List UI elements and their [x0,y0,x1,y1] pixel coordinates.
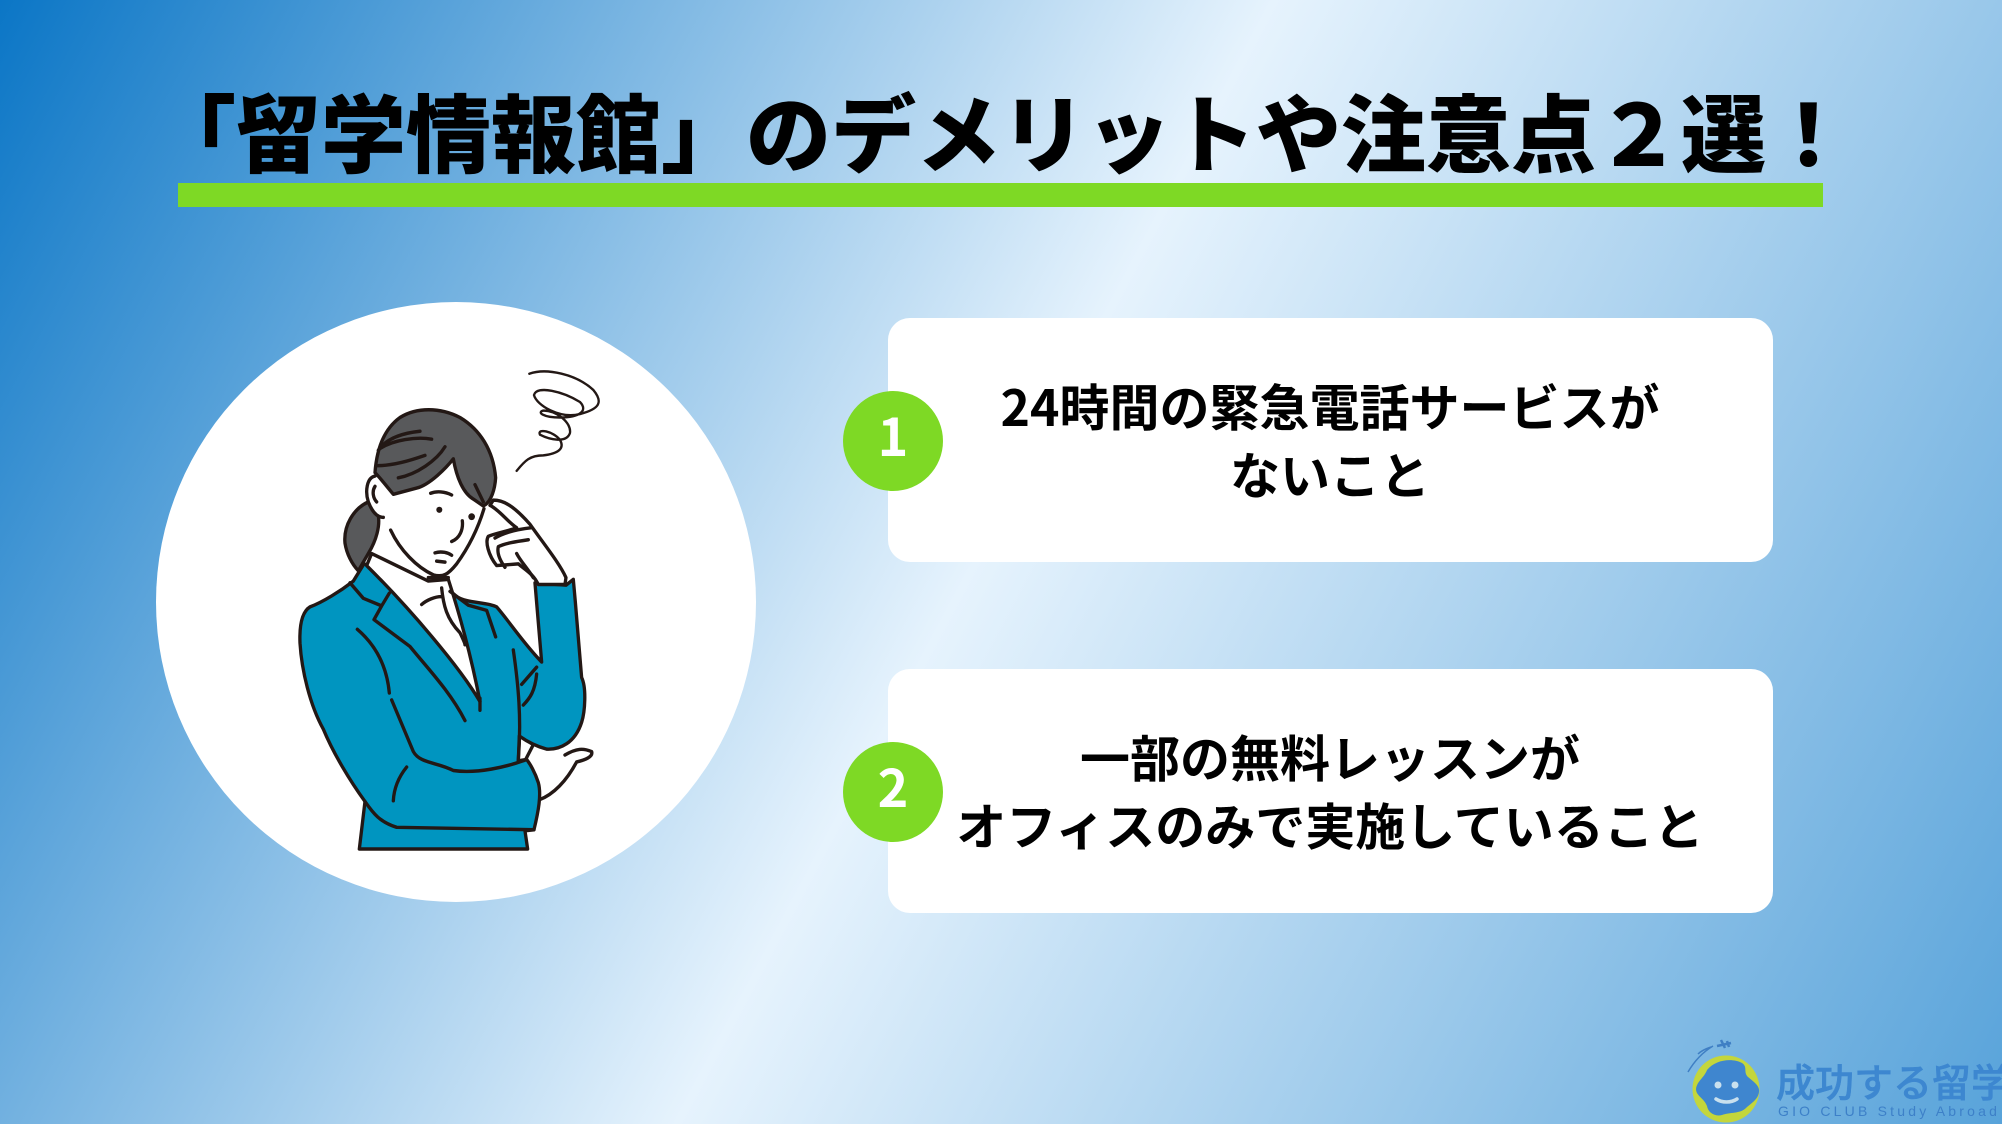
badge 2 [843,742,943,842]
badge 1 [843,391,943,491]
panel: point 1 [843,318,1773,562]
logo: GIO CLUB [1688,1040,2002,1122]
icon: plane with trail [1688,1040,1731,1072]
point 2 text: オフィスのみで実施していること [956,788,1704,860]
badge 2: 2 [878,747,908,822]
title: 「留学情報館」のデメリットや注意点２選！ [151,68,1851,191]
badge 1: 1 [878,396,908,471]
title underline [178,183,1823,207]
point 1 text: 24時間の緊急電話サービスが [1000,369,1660,441]
logo tagline: GIO CLUB Study Abroad [1778,1103,2000,1119]
icon: smiling globe [1692,1056,1760,1122]
card 2 background [888,669,1773,913]
illustration: worried businesswoman [300,371,599,849]
panel: point 2 [843,669,1773,913]
panel: illustration circle [156,302,756,902]
point 1 text: ないこと [1230,437,1430,509]
point 2 text: 一部の無料レッスンが [1080,720,1580,792]
card 1 background [888,318,1773,562]
